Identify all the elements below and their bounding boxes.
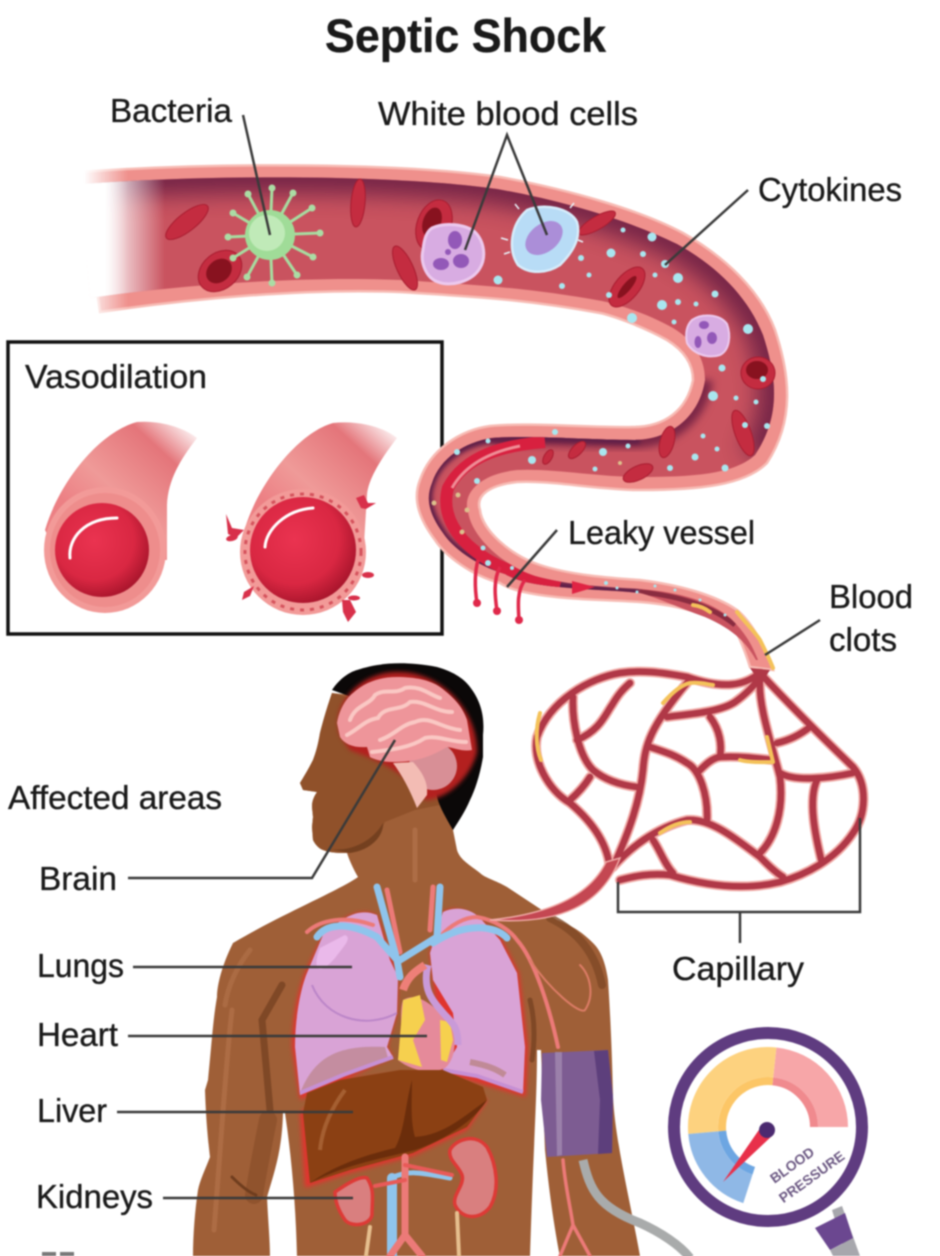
- blood vessel: [70, 155, 800, 680]
- label: capillary: Capillary: [672, 950, 805, 987]
- capillary trunk: [490, 858, 620, 921]
- gauge needle: [723, 1122, 775, 1182]
- heading: vasodilation: Vasodilation: [25, 358, 207, 395]
- leaking blood drops: [473, 560, 525, 624]
- gauge stem: [815, 1206, 860, 1256]
- left lung: [295, 912, 398, 1095]
- label: cytokines: Cytokines: [758, 171, 902, 208]
- arrow: blood flow: [572, 581, 595, 594]
- icon: dilated leaky vessel: [225, 422, 397, 622]
- label: blood clots: [829, 578, 913, 658]
- cerebellum: [409, 742, 457, 790]
- organ glow: [292, 909, 528, 1188]
- label: kidneys: Kidneys: [36, 1178, 153, 1215]
- blood vessels in torso: [307, 887, 590, 1256]
- title: Septic Shock: [325, 9, 607, 62]
- bacteria: [224, 184, 324, 286]
- capillary network: [536, 605, 864, 886]
- blood pressure cuff: [541, 1050, 613, 1157]
- gauge dial: [703, 1062, 833, 1189]
- white blood cell: blue: [501, 203, 583, 272]
- cytokine particles: [454, 228, 770, 616]
- panel: vasodilation: [8, 342, 442, 634]
- heading: affected areas: Affected areas: [8, 779, 222, 816]
- right lung: [430, 909, 525, 1093]
- gaps between arms and torso: [267, 1050, 560, 1256]
- liver: [303, 1070, 487, 1183]
- white blood cell: small: [686, 315, 729, 356]
- vessel fade: [70, 155, 130, 325]
- brain stem: [393, 762, 427, 808]
- label: white blood cells: White blood cells: [378, 95, 638, 132]
- blood clots: [537, 605, 773, 833]
- vessel lumen: [88, 176, 775, 660]
- gauge label: PRESSURE: [776, 1148, 847, 1206]
- label: liver: Liver: [37, 1092, 107, 1129]
- heart: [398, 965, 458, 1071]
- callout lines: [117, 115, 860, 1198]
- hair: [332, 663, 483, 830]
- label: leaky vessel: Leaky vessel: [568, 514, 755, 551]
- label: bacteria: Bacteria: [110, 92, 233, 129]
- label: blood clots: Blood: [829, 578, 913, 615]
- white blood cell: purple: [422, 225, 484, 284]
- icon: normal vessel: [44, 422, 197, 613]
- body shading: [214, 830, 602, 1230]
- label: heart: Heart: [37, 1016, 118, 1053]
- lungs: [295, 909, 525, 1095]
- label: brain: Brain: [39, 860, 117, 897]
- kidneys: [335, 1139, 496, 1225]
- leak droplets: [225, 495, 376, 622]
- gauge hose: [583, 1160, 690, 1256]
- human body: [193, 663, 640, 1256]
- face shading: [300, 693, 440, 853]
- label: lungs: Lungs: [37, 947, 124, 984]
- blood pressure gauge: [674, 1033, 862, 1256]
- red blood cells: [161, 178, 775, 486]
- neck vessels: [387, 887, 433, 952]
- label: blood clots: clots: [829, 621, 897, 658]
- brain: [337, 672, 477, 808]
- gauge label: [763, 1131, 847, 1206]
- gauge label: BLOOD: [767, 1144, 817, 1186]
